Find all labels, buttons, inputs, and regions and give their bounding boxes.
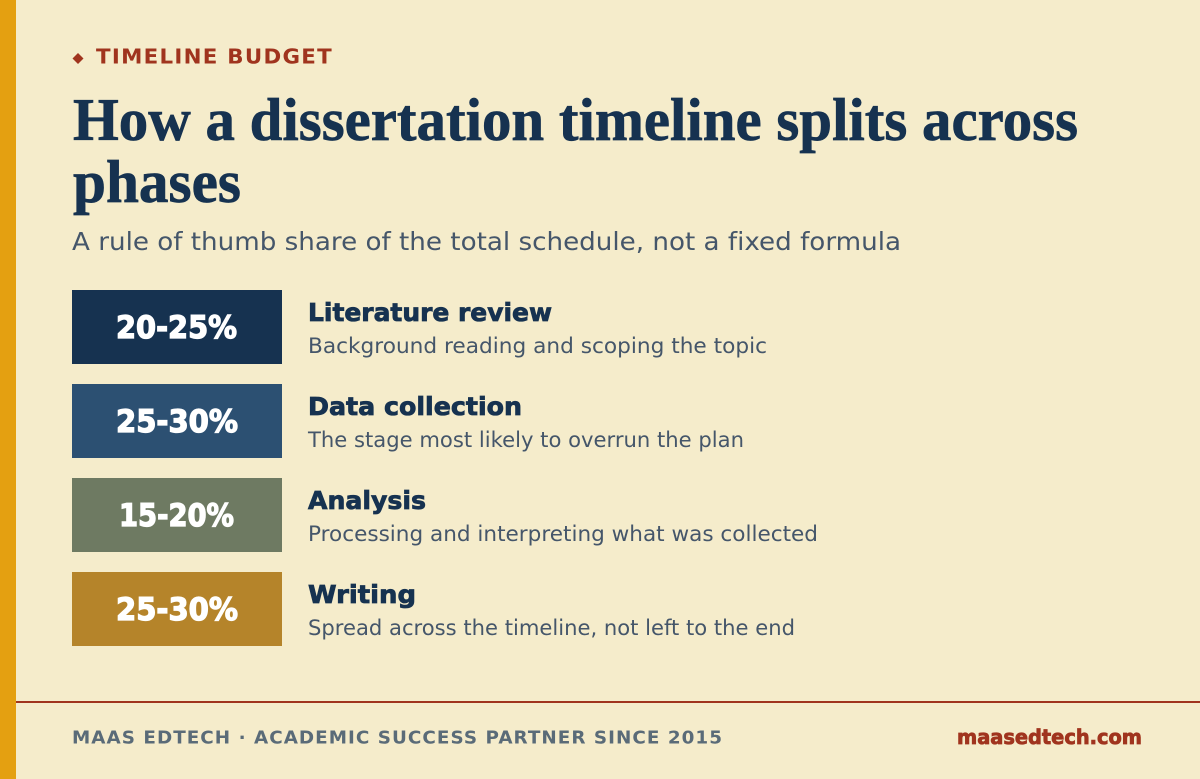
footer credit: MAAS EDTECH · ACADEMIC SUCCESS PARTNER SINCE 2015 [72, 728, 723, 748]
phase description: Processing and interpreting what was collected [308, 522, 818, 546]
percentage value: 15-20% [119, 498, 234, 534]
eyebrow label: TIMELINE BUDGET [96, 44, 333, 68]
subtitle: A rule of thumb share of the total schedule, not a fixed formula [72, 227, 901, 256]
title: phases [73, 149, 241, 215]
phase row: literature review [72, 290, 767, 364]
phase row: analysis [72, 478, 818, 552]
footer website: maasedtech.com [957, 725, 1142, 749]
left accent bar [0, 0, 16, 779]
percentage value: 25-30% [116, 592, 238, 628]
title: How a dissertation timeline splits across [73, 87, 1078, 153]
phase name: Literature review [308, 298, 552, 327]
phase description: Background reading and scoping the topic [308, 334, 767, 358]
percentage block [72, 572, 282, 646]
phase row: data collection [72, 384, 744, 458]
percentage block [72, 478, 282, 552]
percentage block [72, 290, 282, 364]
phase name: Analysis [308, 486, 426, 515]
phase description: Spread across the timeline, not left to the end [308, 616, 795, 640]
phase name: Data collection [308, 392, 522, 421]
phase row: writing [72, 572, 795, 646]
phase name: Writing [308, 580, 416, 609]
percentage block [72, 384, 282, 458]
icon: diamond [72, 53, 84, 64]
eyebrow [72, 44, 333, 68]
phase description: The stage most likely to overrun the plan [307, 428, 744, 452]
percentage value: 20-25% [116, 310, 237, 346]
percentage value: 25-30% [116, 404, 238, 440]
title [73, 87, 1078, 215]
